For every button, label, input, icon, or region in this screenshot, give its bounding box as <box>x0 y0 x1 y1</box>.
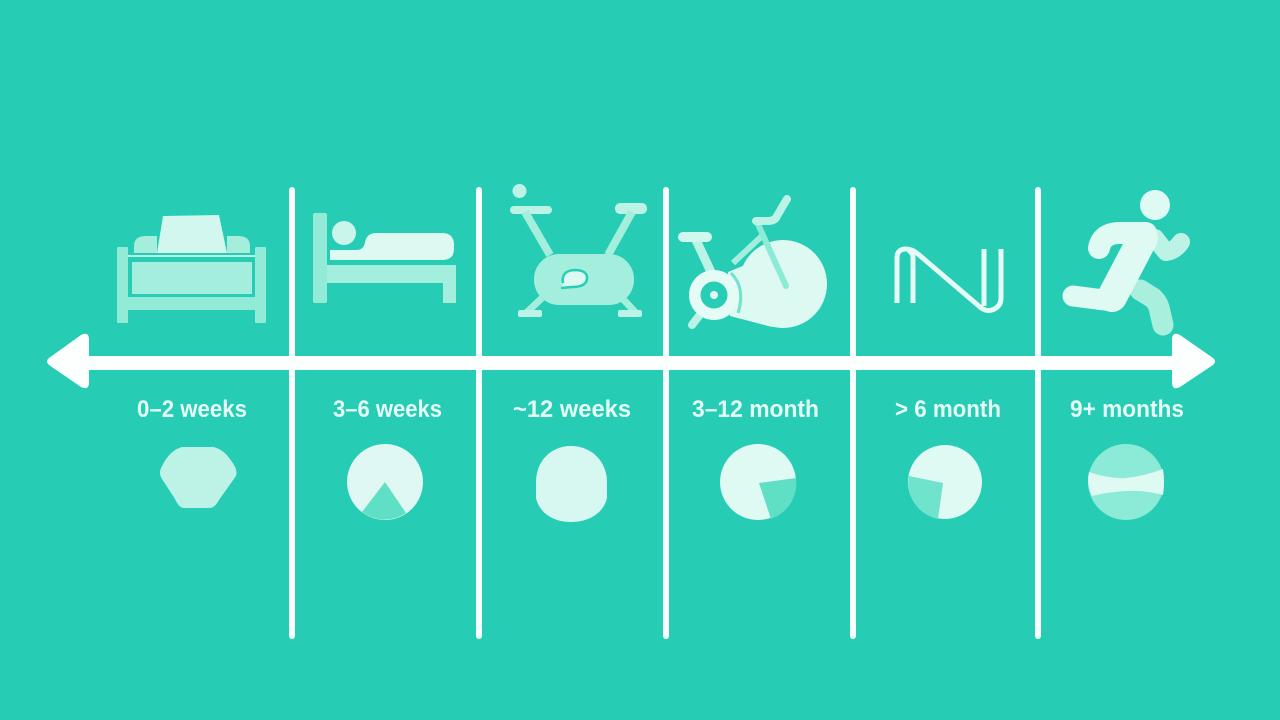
label: phase 4 duration: 3–12 month <box>692 396 819 423</box>
chart: phase 2 pie <box>347 444 423 520</box>
label: phase 6 duration: 9+ months <box>1070 396 1184 423</box>
label: phase 3 duration: ~12 weeks <box>513 396 631 423</box>
icon: stationary exercise bike <box>510 184 647 317</box>
chart: phase 6 banded circle <box>1088 444 1164 520</box>
icon: running person <box>1073 190 1181 325</box>
label: phase 1 duration: 0–2 weeks <box>137 396 247 423</box>
label: phase 5 duration: > 6 month <box>895 396 1001 423</box>
phase dividers <box>289 187 1041 639</box>
icon: abstract outlined N symbol <box>897 249 1001 311</box>
icon: person lying in bed <box>313 213 456 303</box>
chart: phase 4 pie <box>720 444 796 520</box>
icon: spin bike with large flywheel <box>678 199 827 328</box>
icon: bed with pillows <box>117 215 266 323</box>
chart: phase 3 full circle <box>536 446 607 522</box>
chart: phase 5 pie <box>908 445 982 519</box>
label: phase 2 duration: 3–6 weeks <box>333 396 442 423</box>
chart: phase 1 scalloped shape <box>160 447 236 508</box>
timeline arrow <box>47 334 1215 388</box>
